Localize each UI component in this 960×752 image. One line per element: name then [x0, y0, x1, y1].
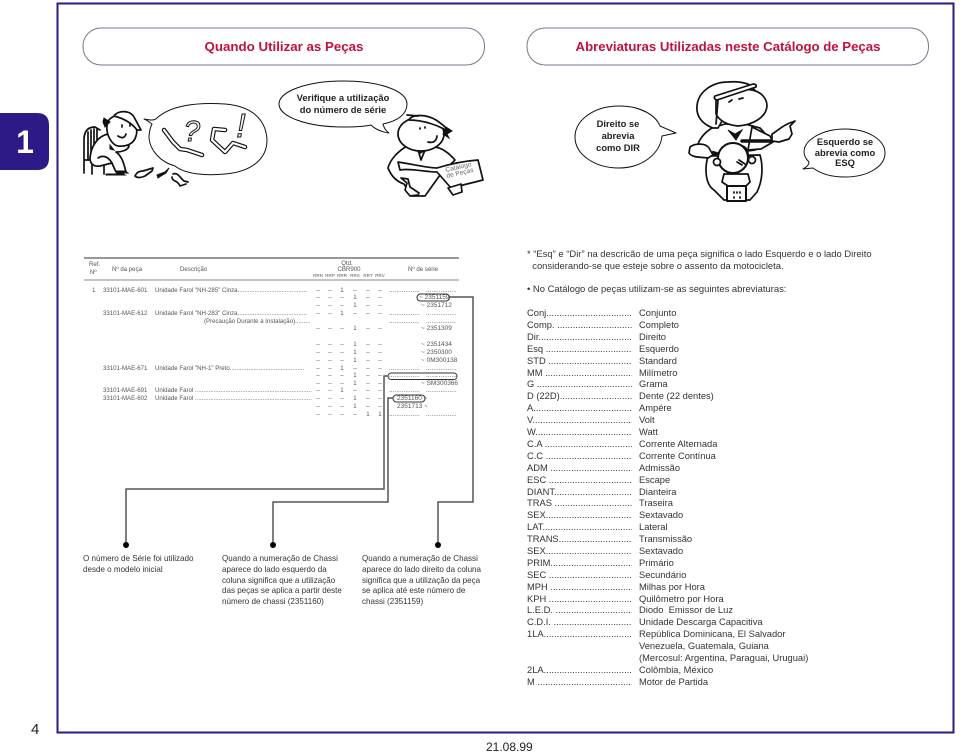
note: serial number from initial model: desde o modelo inicial: [83, 565, 163, 574]
head: [398, 117, 444, 151]
headlamp: [718, 143, 748, 173]
part rows: 33101-MAE-612: [103, 310, 148, 317]
serial number column: .................: [389, 287, 420, 294]
quantity columns: –: [340, 294, 344, 301]
catalogue label: Catálogo: [445, 161, 472, 174]
abbreviations list: Motor de Partida: [639, 677, 708, 687]
serial number column: ~ SM300366: [421, 380, 458, 387]
speech bubble: Direito: [575, 106, 676, 168]
quantity columns: –: [316, 365, 320, 372]
note: Esq and Dir meaning: * “Esq” e “Dir” na descricão de uma peça significa o lado Esquerdo e o lado Direito: [527, 248, 872, 259]
speech bubble: Esquerdo: Esquerdo se: [817, 136, 873, 147]
quantity columns: –: [340, 411, 344, 418]
note: serial number from initial model: O número de Série foi utilizado: [83, 554, 194, 563]
bullet: abbreviations intro: • No Catálogo de peças utilizam-se as seguintes abreviaturas:: [527, 283, 786, 294]
quantity columns: –: [378, 372, 382, 379]
serial number column: .................: [389, 365, 420, 372]
note: chassis number on left side: [222, 554, 342, 606]
quantity columns: –: [328, 302, 332, 309]
abbreviations list: Transmissão: [639, 534, 692, 544]
quantity columns: –: [378, 287, 382, 294]
abbreviations list: Direito: [639, 332, 666, 342]
quantity columns: –: [378, 294, 382, 301]
page number: 4: [31, 721, 39, 738]
quantity columns: –: [316, 403, 320, 410]
quantity columns: –: [340, 395, 344, 402]
quantity columns: –: [340, 357, 344, 364]
abbreviations list: Milhas por Hora: [639, 582, 705, 592]
serial number column: ~ 2351712: [421, 302, 452, 309]
quantity columns: –: [366, 341, 370, 348]
table header: [89, 260, 439, 278]
quantity columns: –: [328, 294, 332, 301]
serial number highlight ovals: [388, 294, 457, 402]
question mark: ?: [184, 116, 201, 148]
quantity columns: –: [316, 411, 320, 418]
quantity columns: –: [340, 380, 344, 387]
heading pill: Quando Utilizar as Peças: [83, 28, 484, 65]
handlebar: [742, 139, 770, 143]
note: chassis number on left side: número de chassi (2351160): [222, 597, 324, 606]
part rows: 33101-MAE-671: [103, 365, 148, 372]
note: chassis number on right side: significa que a utilização da peça: [362, 576, 481, 585]
abbreviations list: Lateral: [639, 522, 668, 532]
quantity columns: –: [378, 387, 382, 394]
abbreviations list: Watt: [639, 427, 658, 437]
table header: RRN: [313, 273, 323, 278]
abbreviations list: Dente (22 dentes): [639, 391, 714, 401]
chair: [84, 127, 110, 174]
table header: RRP: [325, 273, 335, 278]
quantity columns: –: [328, 380, 332, 387]
thought bubble: [144, 104, 267, 175]
quantity columns: –: [366, 325, 370, 332]
quantity columns: –: [378, 380, 382, 387]
quantity columns: –: [316, 380, 320, 387]
mirrors: [714, 158, 720, 166]
table header: CBR900: [337, 266, 361, 273]
quantity columns: 1: [353, 302, 357, 309]
quantity columns: –: [378, 357, 382, 364]
quantity columns: –: [366, 287, 370, 294]
abbreviations list: Ampére: [639, 403, 672, 413]
tie: [416, 149, 427, 160]
quantity columns: –: [316, 341, 320, 348]
serial number column: .................: [426, 287, 457, 294]
part rows: 1: [92, 287, 96, 294]
table header: Nº da peça: [112, 266, 143, 273]
table header: Descrição: [180, 266, 208, 273]
abbreviations list: Completo: [639, 320, 679, 330]
quantity columns: 1: [340, 310, 344, 317]
part rows: 33101-MAE-691: [103, 387, 148, 394]
quantity columns: –: [316, 395, 320, 402]
quantity columns: 1: [340, 387, 344, 394]
quantity columns: –: [378, 365, 382, 372]
right arm and pointing hand: [748, 127, 773, 150]
note: chassis number on right side: se aplica até este número de: [362, 586, 466, 595]
part: tube two: [212, 129, 245, 152]
serial number column: ~ 2351309: [421, 325, 452, 332]
quantity columns: –: [366, 310, 370, 317]
torso: [697, 124, 772, 155]
quantity columns: –: [366, 395, 370, 402]
speech bubble: Direito: abrevia: [602, 130, 635, 141]
abbreviations list: Venezuela, Guatemala, Guiana: [639, 641, 769, 651]
quantity columns: –: [353, 365, 357, 372]
quantity columns: –: [340, 325, 344, 332]
serial number column: [389, 287, 458, 418]
illustration: mechanic thinking with thought bubble: [84, 104, 267, 186]
abbreviations list: Sextavado: [639, 546, 683, 556]
note: chassis number on left side: aparece do lado esquerdo da: [222, 565, 327, 574]
dark fairing: [720, 144, 750, 158]
serial number column: .................: [389, 318, 420, 325]
quantity columns: –: [366, 302, 370, 309]
serial number column: .................: [426, 310, 457, 317]
abbreviations list: Standard: [639, 356, 677, 366]
illustration: man reading parts catalogue: [388, 115, 483, 196]
quantity columns: –: [328, 357, 332, 364]
note: Esq and Dir meaning: [527, 248, 872, 271]
table header: RRV: [375, 273, 385, 278]
abbreviations list: Conjunto: [639, 308, 676, 318]
quantity columns: –: [328, 411, 332, 418]
quantity columns: –: [378, 341, 382, 348]
quantity columns: 1: [340, 365, 344, 372]
abbreviations list: Colômbia, México: [639, 665, 713, 675]
abbreviations list: Sextavado: [639, 510, 683, 520]
serial number column: .................: [426, 365, 457, 372]
heading pill: Abreviaturas: Abreviaturas Utilizadas neste Catálogo de Peças: [576, 39, 880, 54]
abbreviations list: (Mercosul: Argentina, Paraguai, Uruguai): [639, 653, 808, 663]
abbreviations list: Traseira: [639, 498, 673, 508]
head and cap: [107, 114, 137, 146]
quantity columns: –: [340, 349, 344, 356]
abbreviations list: Dianteira: [639, 487, 676, 497]
note: chassis number on left side: coluna significa que a utilização: [222, 576, 336, 585]
quantity columns: –: [378, 403, 382, 410]
serial number column: .................: [426, 411, 457, 418]
quantity columns: –: [353, 287, 357, 294]
note: chassis number on right side: aparece do lado direito da coluna: [362, 565, 482, 574]
quantity columns: –: [378, 395, 382, 402]
torso: [388, 146, 455, 196]
table header: Ref.: [89, 261, 100, 268]
section tab number 1: [0, 113, 49, 170]
speech bubble: Esquerdo: abrevia como: [815, 147, 875, 158]
note: Esq and Dir meaning: considerando-se que esteje sobre o assento da motocicleta.: [532, 260, 784, 271]
quantity columns: –: [366, 372, 370, 379]
quantity columns: –: [328, 325, 332, 332]
quantity columns: 1: [353, 395, 357, 402]
illustration: man reading parts catalogue: de Peças: [446, 167, 475, 180]
table rules: [84, 257, 459, 259]
note: chassis number on right side: chassi (2351159): [362, 597, 423, 606]
quantity columns: –: [366, 380, 370, 387]
left hand: [689, 144, 713, 158]
quantity columns: –: [316, 349, 320, 356]
quantity columns: –: [328, 310, 332, 317]
serial number column: .................: [426, 387, 457, 394]
quantity columns: 1: [353, 380, 357, 387]
abbreviations list: Corrente Alternada: [639, 439, 717, 449]
quantity columns: –: [353, 310, 357, 317]
quantity columns: –: [378, 302, 382, 309]
table header: RRS: [350, 273, 360, 278]
body: [90, 134, 129, 173]
catalogue book: [398, 160, 483, 188]
quantity columns: –: [378, 310, 382, 317]
table header: RRR: [337, 273, 348, 278]
quantity columns: –: [316, 387, 320, 394]
quantity columns: –: [328, 349, 332, 356]
quantity columns: –: [378, 325, 382, 332]
quantity columns: –: [340, 302, 344, 309]
hands: [401, 178, 419, 196]
part rows: Unidade Farol "NH-283" Cinza.........................................: [155, 310, 307, 317]
speech bubble: Esquerdo: ESQ: [835, 157, 855, 168]
quantity columns: 1: [340, 287, 344, 294]
quantity columns: –: [328, 341, 332, 348]
table header: Qtd.: [341, 260, 353, 267]
parts table: [84, 258, 459, 418]
visor: [714, 84, 756, 100]
table header: Nº de série: [408, 266, 439, 273]
quantity columns: –: [378, 349, 382, 356]
part rows: Unidade Farol "NH-285" Cinza.........................................: [155, 287, 307, 294]
quantity columns: –: [366, 365, 370, 372]
quantity columns: –: [366, 403, 370, 410]
heading pill: Abreviaturas: [527, 28, 928, 65]
quantity columns: 1: [353, 357, 357, 364]
legs and bike sides: [706, 155, 762, 200]
front wheel: [722, 174, 750, 186]
part rows: 33101-MAE-602: [103, 395, 148, 402]
serial number column: .................: [426, 318, 457, 325]
quantity columns: –: [316, 302, 320, 309]
quantity columns: –: [366, 294, 370, 301]
quantity columns: 1: [378, 411, 382, 418]
quantity columns: [316, 287, 382, 418]
serial number column: .................: [426, 372, 457, 379]
part rows: Unidade Farol .....................................................................: [155, 387, 312, 394]
speech bubble: Verifique: Verifique a utilização: [297, 92, 390, 103]
note: chassis number on right side: [362, 554, 482, 606]
speech bubble: Direito: como DIR: [596, 142, 640, 153]
quantity columns: –: [328, 365, 332, 372]
quantity columns: 1: [353, 341, 357, 348]
leader line: third note: [435, 297, 473, 548]
quantity columns: 1: [353, 403, 357, 410]
quantity columns: –: [353, 387, 357, 394]
quantity columns: –: [340, 403, 344, 410]
quantity columns: 1: [353, 349, 357, 356]
quantity columns: –: [340, 341, 344, 348]
quantity columns: 1: [353, 294, 357, 301]
serial number column: .................: [389, 387, 420, 394]
speech bubble: Verifique: do número de série: [300, 104, 386, 115]
quantity columns: –: [366, 387, 370, 394]
quantity columns: 1: [366, 411, 370, 418]
abbreviations list: Quilômetro por Hora: [639, 594, 724, 604]
quantity columns: 1: [353, 325, 357, 332]
note: serial number from initial model: [83, 554, 194, 574]
section tab number 1: 1: [16, 124, 34, 160]
heading pill: Quando Utilizar as Peças: Quando Utilizar as Peças: [205, 39, 363, 54]
quantity columns: –: [316, 325, 320, 332]
face: [716, 89, 767, 126]
part rows: Unidade Farol "NH-1" Preto............................................: [155, 365, 305, 372]
abbreviations list: Corrente Contínua: [639, 451, 716, 461]
abbreviations list: Admissão: [639, 463, 680, 473]
quantity columns: –: [328, 372, 332, 379]
abbreviations list: Grama: [639, 379, 668, 389]
abbreviations list: Secundário: [639, 570, 686, 580]
part rows: [92, 287, 312, 402]
quantity columns: –: [316, 294, 320, 301]
abbreviations list: Escape: [639, 475, 670, 485]
serial number column: ~ 0M300138: [421, 357, 458, 364]
note: chassis number on left side: das peças se aplica a partir deste: [222, 586, 342, 595]
note: chassis number on right side: Quando a numeração de Chassi: [362, 554, 478, 563]
leader line: second note: [270, 398, 393, 548]
quantity columns: –: [316, 310, 320, 317]
speech bubble: Direito: Direito se: [597, 118, 639, 129]
table header: Nº: [90, 269, 97, 276]
serial number column: .................: [389, 372, 420, 379]
quantity columns: –: [366, 349, 370, 356]
exclamation mark: !: [236, 107, 246, 144]
quantity columns: –: [328, 403, 332, 410]
quantity columns: –: [366, 357, 370, 364]
quantity columns: –: [328, 395, 332, 402]
quantity columns: –: [328, 387, 332, 394]
quantity columns: –: [353, 411, 357, 418]
serial number column: ~ 2351159: [419, 294, 450, 301]
abbreviations list: Diodo Emissor de Luz: [639, 605, 733, 615]
illustration: rider on motorcycle: [689, 82, 795, 201]
abbreviations list: Milímetro: [639, 368, 677, 378]
quantity columns: –: [328, 287, 332, 294]
note: chassis number on left side: Quando a numeração de Chassi: [222, 554, 338, 563]
abbreviations list: República Dominicana, El Salvador: [639, 629, 785, 639]
part rows: 33101-MAE-601: [103, 287, 148, 294]
part rows: Unidade Farol .....................................................................: [155, 395, 312, 402]
abbreviations list: Primário: [639, 558, 674, 568]
quantity columns: –: [316, 357, 320, 364]
leader line: first note: [123, 376, 388, 548]
quantity columns: –: [340, 372, 344, 379]
serial number column: ~ 2350300: [421, 349, 452, 356]
quantity columns: –: [316, 372, 320, 379]
abbreviations list: Esquerdo: [639, 344, 679, 354]
helmet: [697, 82, 760, 128]
part: tube one: [164, 130, 202, 155]
table header: RRT: [363, 273, 373, 278]
serial number column: ~ 2351434: [421, 341, 452, 348]
cap: [409, 116, 449, 132]
serial number column: .................: [389, 411, 420, 418]
serial number column: 2351160 ~: [397, 395, 428, 402]
speech bubble: Esquerdo: [803, 129, 885, 177]
quantity columns: –: [316, 287, 320, 294]
abbreviations list: Unidade Descarga Capacitiva: [639, 617, 763, 627]
abbreviations list: Volt: [639, 415, 655, 425]
quantity columns: 1: [353, 372, 357, 379]
tools: [135, 168, 153, 178]
speech bubble: Verifique: [279, 81, 407, 133]
serial number column: 2351713 ~: [397, 403, 428, 410]
serial number column: .................: [389, 310, 420, 317]
part rows: (Precaução Durante a Instalação).........: [204, 318, 311, 325]
